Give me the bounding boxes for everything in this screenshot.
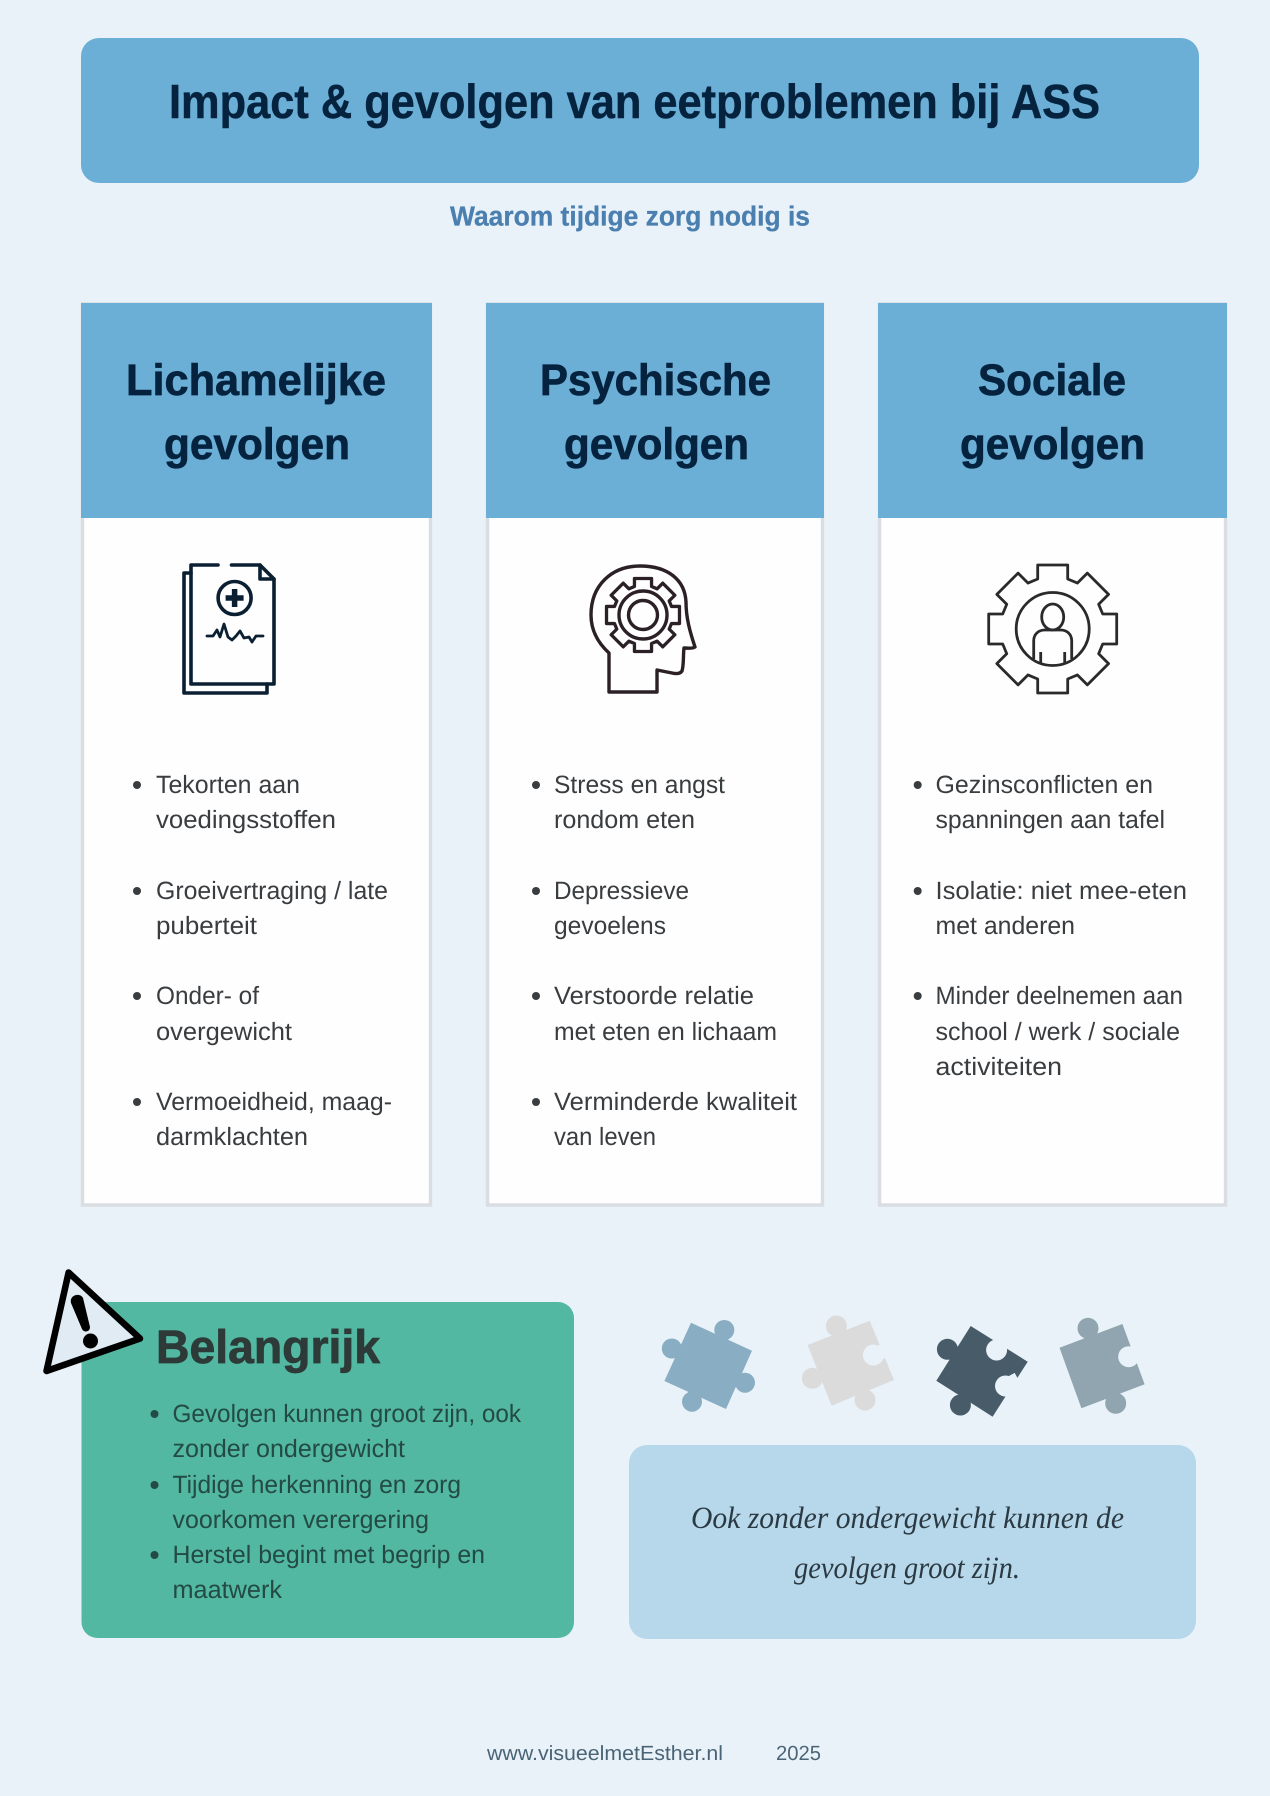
list: belangrijk: Tijdige herkenning en zorg [172, 1471, 461, 1499]
list: lichamelijke gevolgen: puberteit [156, 912, 257, 940]
list: sociale gevolgen [914, 771, 1187, 1081]
heading: lichamelijke gevolgen: gevolgen [164, 420, 350, 469]
title banner [81, 38, 1199, 183]
puzzle piece 2 [802, 1316, 894, 1410]
panel: quote [629, 1445, 1196, 1639]
panel: psychische gevolgen [486, 303, 824, 1205]
list: lichamelijke gevolgen: darmklachten [156, 1123, 308, 1151]
list: belangrijk [150, 1400, 521, 1604]
puzzle piece 4 [1060, 1318, 1145, 1414]
heading: sociale gevolgen: Sociale [978, 356, 1126, 405]
list: psychische gevolgen: van leven [554, 1123, 656, 1151]
puzzle pieces [662, 1316, 1145, 1417]
list: belangrijk: voorkomen verergering [172, 1506, 429, 1534]
list: psychische gevolgen: Verminderde kwaliteit [554, 1088, 797, 1116]
footer [486, 1742, 821, 1765]
heading: sociale gevolgen: gevolgen [960, 420, 1145, 469]
list: psychische gevolgen: rondom eten [554, 806, 695, 834]
heading: belangrijk: Belangrijk [156, 1320, 381, 1373]
list: sociale gevolgen: school / werk / sociale [936, 1018, 1180, 1046]
list: belangrijk: zonder ondergewicht [172, 1435, 405, 1463]
footer: 2025 [776, 1742, 821, 1765]
panel: lichamelijke gevolgen [81, 303, 432, 1205]
list: belangrijk: Herstel begint met begrip en [172, 1541, 485, 1569]
list: psychische gevolgen: gevoelens [554, 912, 666, 940]
list: psychische gevolgen [532, 771, 797, 1151]
list: lichamelijke gevolgen: voedingsstoffen [156, 806, 336, 834]
footer: www.visueelmetEsther.nl [486, 1742, 723, 1765]
list: psychische gevolgen: Stress en angst [554, 771, 725, 799]
panel: belangrijk [46, 1272, 574, 1638]
list: sociale gevolgen: Minder deelnemen aan [936, 982, 1183, 1010]
heading: psychische gevolgen: gevolgen [564, 420, 749, 469]
quote text: gevolgen groot zijn. [794, 1550, 1020, 1585]
icon: medical document [184, 565, 274, 693]
list: lichamelijke gevolgen: overgewicht [156, 1018, 292, 1046]
list: sociale gevolgen: met anderen [936, 912, 1075, 940]
title: Impact & gevolgen van eetproblemen bij ASS [169, 76, 1100, 129]
heading: sociale gevolgen [960, 356, 1145, 469]
list: lichamelijke gevolgen: Tekorten aan [156, 771, 300, 799]
icon: gear with person [989, 565, 1117, 693]
heading: lichamelijke gevolgen [126, 356, 386, 469]
list: psychische gevolgen: Verstoorde relatie [554, 982, 754, 1010]
puzzle piece 3 [936, 1326, 1028, 1417]
list: psychische gevolgen: Depressieve [554, 877, 689, 905]
heading: psychische gevolgen: Psychische [540, 356, 771, 405]
icon: head with gear [591, 566, 695, 692]
list: sociale gevolgen: Gezinsconflicten en [936, 771, 1153, 799]
list: sociale gevolgen: activiteiten [936, 1053, 1062, 1081]
heading: lichamelijke gevolgen: Lichamelijke [126, 356, 386, 405]
quote text: Ook zonder ondergewicht kunnen de [691, 1500, 1124, 1535]
subtitle: Waarom tijdige zorg nodig is [450, 200, 810, 232]
list: belangrijk: maatwerk [172, 1576, 282, 1604]
list: sociale gevolgen: Isolatie: niet mee-eten [936, 877, 1187, 905]
list: lichamelijke gevolgen: Groeivertraging / late [156, 877, 388, 905]
panel: sociale gevolgen [878, 303, 1227, 1205]
list: belangrijk: Gevolgen kunnen groot zijn, ook [172, 1400, 521, 1428]
list: sociale gevolgen: spanningen aan tafel [936, 806, 1165, 834]
icon: warning triangle [46, 1272, 140, 1371]
list: lichamelijke gevolgen: Vermoeidheid, maag- [156, 1088, 392, 1116]
list: psychische gevolgen: met eten en lichaam [554, 1018, 777, 1046]
list: lichamelijke gevolgen [133, 771, 392, 1151]
heading: psychische gevolgen [540, 356, 771, 469]
puzzle piece 1 [662, 1320, 755, 1412]
quote text [691, 1500, 1124, 1585]
list: lichamelijke gevolgen: Onder- of [156, 982, 259, 1010]
